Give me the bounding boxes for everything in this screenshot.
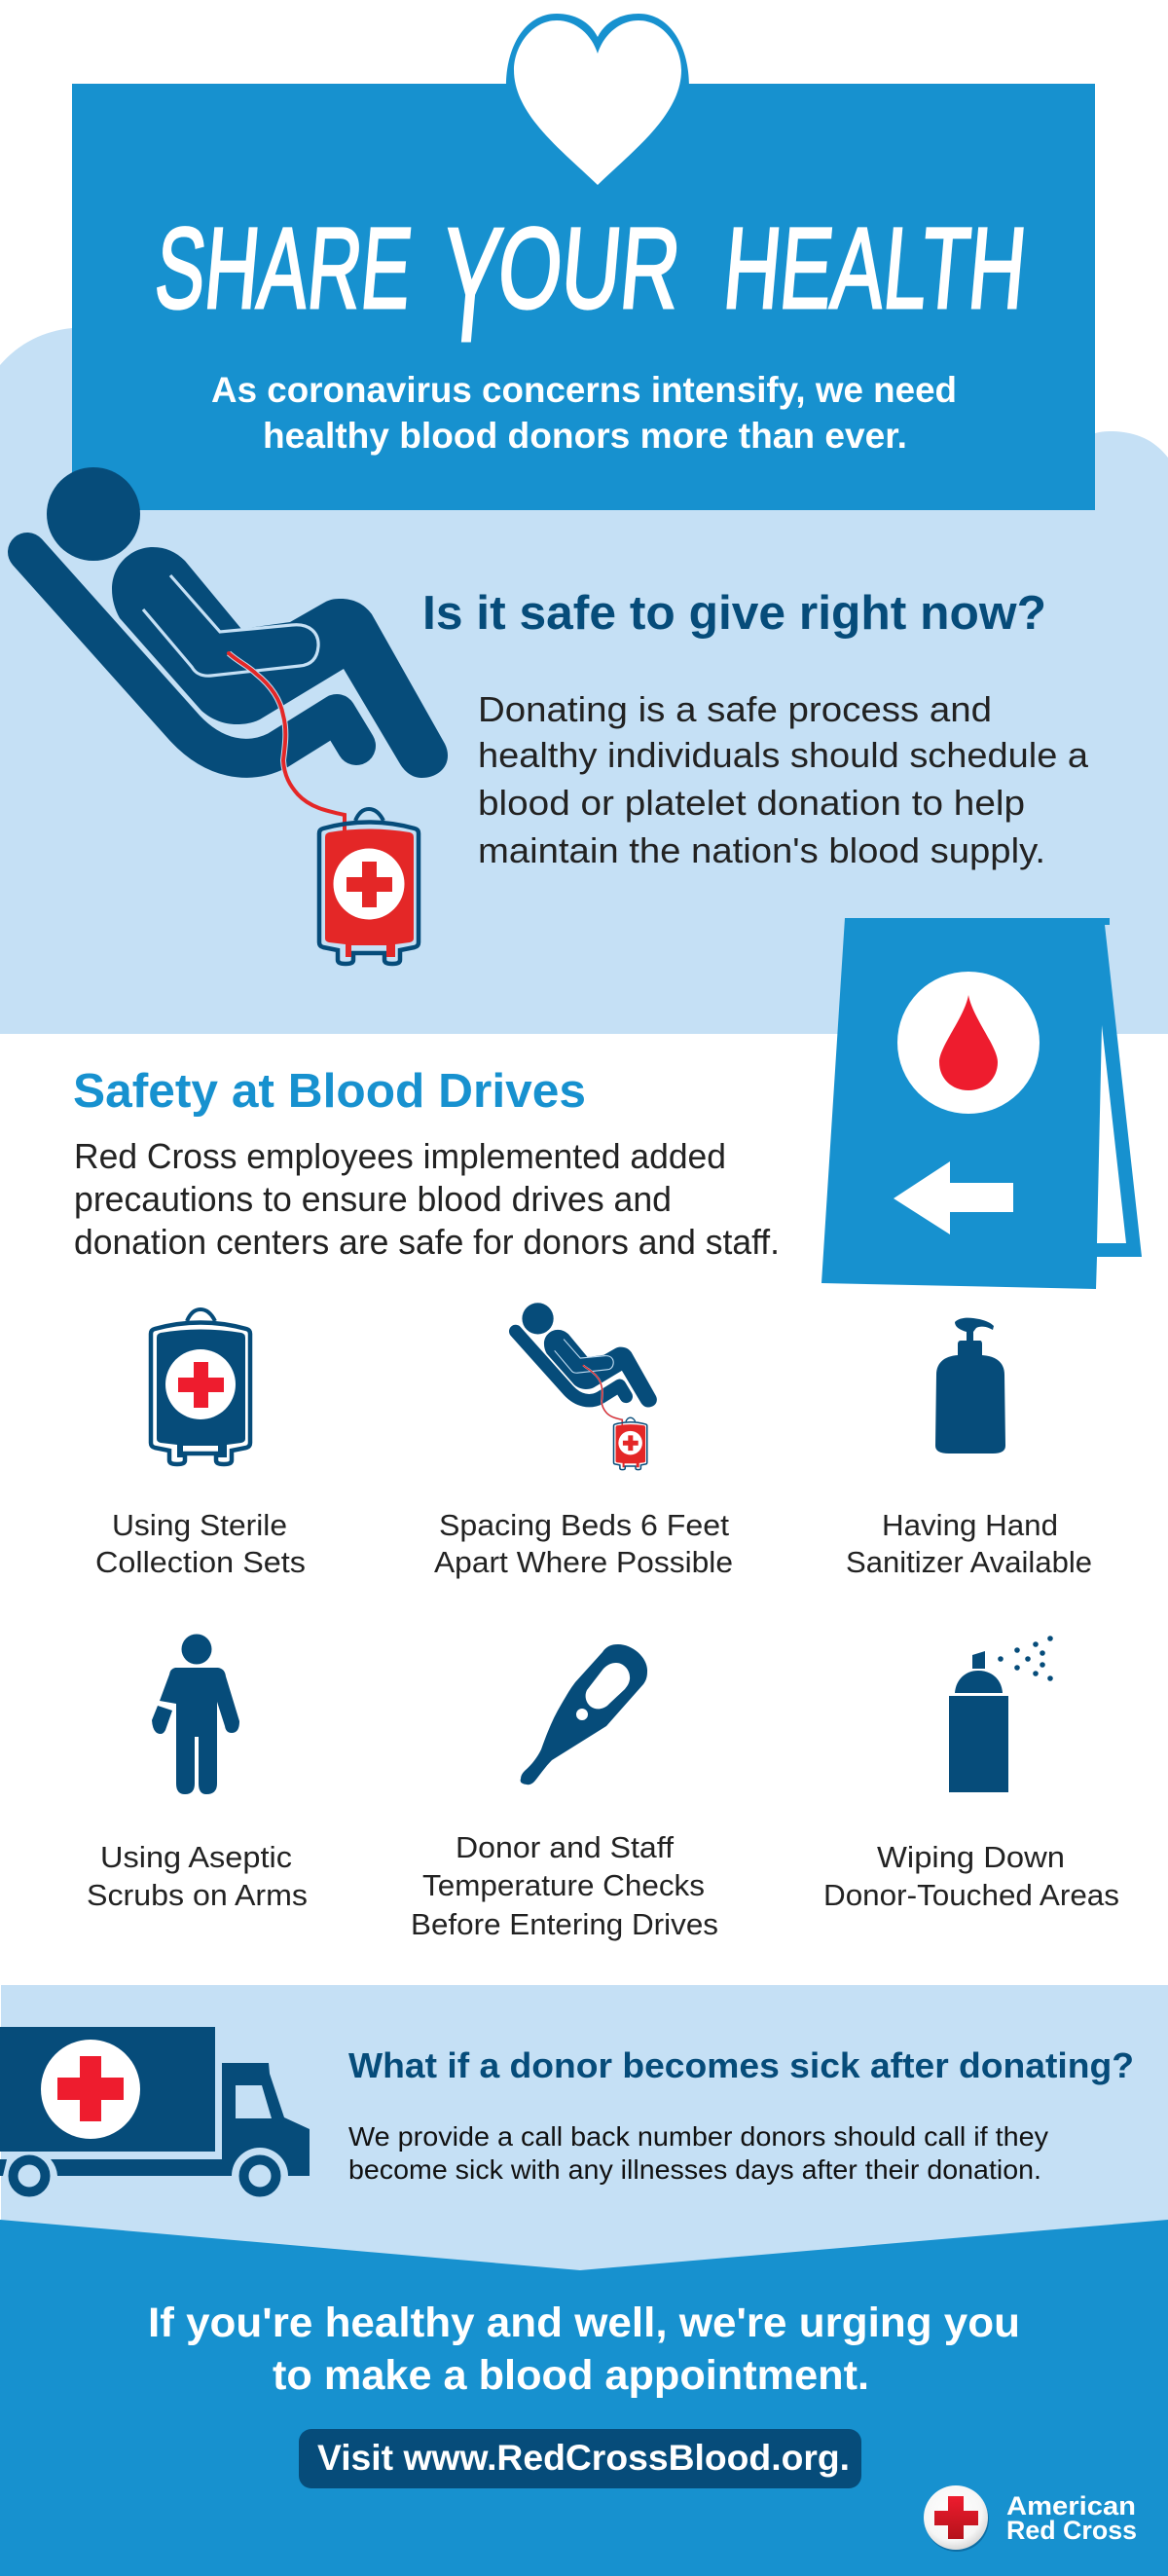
- text: safe process: maintain the nation's blood supply.: [478, 830, 1045, 870]
- item: temperature checks: [411, 1644, 718, 1941]
- item: hand sanitizer: [846, 1318, 1092, 1579]
- heading: is it safe: Is it safe to give right now?: [422, 587, 1046, 640]
- text: call back: We provide a call back number donors should call if they: [348, 2121, 1048, 2152]
- button: website: Visit www.RedCrossBlood.org.: [317, 2438, 850, 2478]
- logo: American Red Cross: American: [1006, 2491, 1136, 2521]
- icon: person: [152, 1634, 239, 1794]
- icon: thermometer: [521, 1644, 647, 1785]
- caption: Donor and Staff: [456, 1830, 674, 1864]
- caption: Wiping Down: [877, 1840, 1065, 1874]
- logo: American Red Cross: Red Cross: [1006, 2516, 1137, 2545]
- caption: Using Sterile: [112, 1508, 287, 1542]
- text: precautions: Red Cross employees implemented added: [74, 1136, 726, 1176]
- caption: Spacing Beds 6 Feet: [439, 1508, 729, 1542]
- icon: donor in reclining chair with blood bag: [27, 467, 448, 964]
- caption: Scrubs on Arms: [87, 1878, 308, 1912]
- caption: Sanitizer Available: [846, 1545, 1092, 1579]
- text: call back: become sick with any illnesses days after their donation.: [348, 2154, 1041, 2185]
- title: SHARE: [151, 204, 417, 333]
- icon: navy blood bag: [151, 1309, 250, 1464]
- caption: Temperature Checks: [422, 1868, 705, 1902]
- heading: safety at blood drives: Safety at Blood Drives: [73, 1065, 586, 1118]
- caption: Donor-Touched Areas: [823, 1878, 1119, 1912]
- text: urging: to make a blood appointment.: [273, 2352, 869, 2399]
- title: Y: [434, 195, 508, 376]
- subtitle: healthy blood donors more than ever.: [263, 416, 907, 456]
- light blue cloud background: [0, 328, 1168, 1034]
- icon: small donor: [516, 1303, 657, 1470]
- button: website: [299, 2429, 861, 2488]
- title: OUR: [493, 204, 685, 333]
- text: urging: If you're healthy and well, we're urging you: [148, 2300, 1020, 2346]
- panel: donor becomes sick: [0, 1985, 1168, 2277]
- item: spacing beds: [434, 1303, 733, 1579]
- logo: American Red Cross: [924, 2485, 1137, 2552]
- text: safe process: blood or platelet donation to help: [478, 783, 1025, 823]
- item: sterile collection sets: [95, 1309, 306, 1579]
- caption: Collection Sets: [95, 1545, 306, 1579]
- icon: heart: [506, 14, 689, 185]
- panel: call to action: [0, 2220, 1168, 2576]
- icon: truck: [0, 2027, 310, 2192]
- text: precautions: donation centers are safe for donors and staff.: [74, 1222, 780, 1262]
- heading: what if: What if a donor becomes sick after donating?: [348, 2045, 1134, 2085]
- caption: Using Aseptic: [100, 1840, 292, 1874]
- icon: sanitizer bottle: [935, 1318, 1005, 1454]
- title: HEALTH: [719, 204, 1031, 333]
- header panel: [72, 14, 1095, 510]
- caption: Having Hand: [882, 1508, 1058, 1542]
- text: safe process: healthy individuals should schedule a: [478, 735, 1089, 775]
- item: aseptic scrubs: [87, 1634, 308, 1912]
- subtitle: As coronavirus concerns intensify, we need: [211, 370, 957, 410]
- text: precautions: precautions to ensure blood drives and: [74, 1179, 672, 1219]
- item: wiping down: [823, 1636, 1119, 1912]
- text: safe process: Donating is a safe process and: [478, 689, 992, 729]
- icon: spray can: [949, 1636, 1053, 1792]
- caption: Before Entering Drives: [411, 1907, 718, 1941]
- caption: Apart Where Possible: [434, 1545, 733, 1579]
- icon: directional sign: [821, 918, 1142, 1289]
